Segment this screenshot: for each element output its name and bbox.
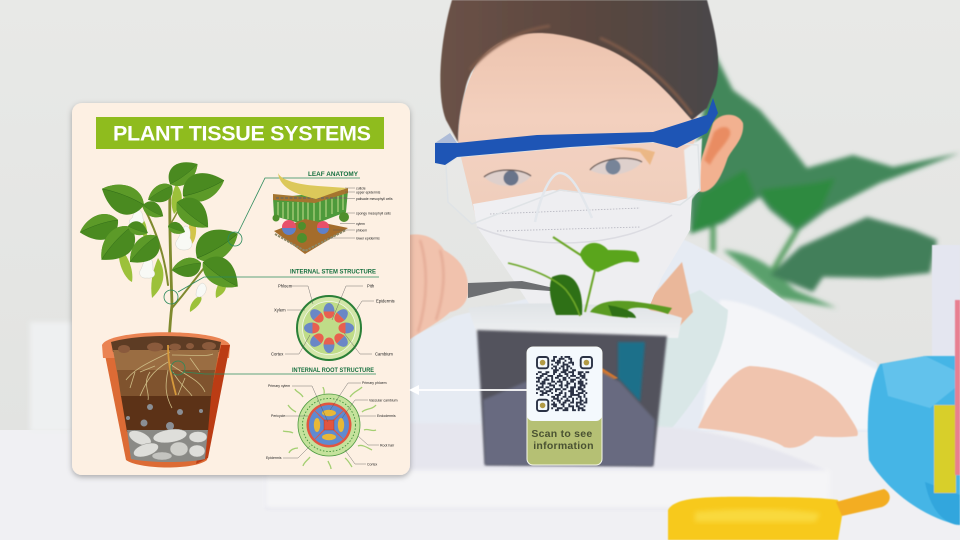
cup body (477, 330, 667, 466)
QR callout card (527, 347, 602, 465)
endodermis ring (306, 402, 352, 448)
leaf leaders (328, 188, 355, 238)
stem labels: Cambium (375, 352, 393, 356)
QR finder bottom-left (537, 400, 548, 411)
stem labels: Pith (367, 284, 375, 288)
pebbles (126, 404, 203, 430)
seedling (508, 237, 672, 318)
plastic cup rim (468, 303, 682, 338)
translucent bottle on right (932, 245, 960, 360)
scan caption: information (533, 440, 594, 452)
stem labels: Phloem (278, 284, 293, 288)
root labels: Cortex (367, 462, 378, 466)
face (458, 20, 700, 215)
cortex rings (302, 398, 356, 452)
lab coat (409, 238, 878, 432)
root hairs (283, 387, 376, 469)
stem labels: Cortex (271, 352, 284, 356)
palisade cell lines (278, 193, 343, 223)
lens side panel (684, 138, 702, 205)
upper leaf (690, 50, 960, 234)
card QR area (527, 347, 602, 421)
cell texture (276, 197, 348, 199)
leaf labels: spongy mesophyll cells (356, 212, 391, 216)
root leaders (283, 383, 379, 464)
blurred glass on left (30, 322, 75, 432)
palisade cells (273, 190, 348, 226)
vascular bundles (304, 303, 354, 353)
central xylem (324, 420, 334, 430)
root labels: Pericycle (271, 414, 285, 418)
goggles clear corner (435, 133, 457, 143)
tray front (265, 470, 830, 508)
root labels (266, 381, 398, 466)
heading: leaf anatomy: LEAF ANATOMY (308, 171, 358, 178)
top brown band (273, 188, 348, 203)
leaf anatomy diagram (272, 173, 393, 254)
neck (645, 262, 693, 334)
root labels: Root hair (380, 444, 395, 448)
tweezers (468, 281, 563, 298)
mask fold lines (477, 208, 672, 243)
pods (119, 184, 226, 312)
eyes (484, 158, 642, 186)
taproot (168, 345, 176, 395)
poster card (72, 103, 410, 475)
white tray (265, 423, 830, 510)
right hand (698, 366, 858, 448)
flower pot (102, 332, 230, 468)
heading: stem structure: INTERNAL STEM STRUCTURE (290, 268, 376, 276)
yellow cuticle (278, 173, 347, 199)
scan caption: Scan to see (531, 428, 592, 440)
hair (440, 0, 718, 142)
stem labels: Xylem (274, 308, 286, 312)
roots (126, 352, 213, 408)
flowers (129, 210, 206, 297)
pot right shade (196, 345, 230, 464)
callout lines (164, 178, 379, 375)
drainage rocks (127, 427, 207, 460)
blue container (868, 300, 960, 525)
inner shirt (652, 290, 728, 428)
finger creases (418, 240, 443, 332)
title banner: PLANT TISSUE SYSTEMS (113, 122, 371, 146)
photo background: table (0, 430, 960, 540)
face mask (473, 190, 692, 305)
leaves (77, 154, 247, 296)
safety goggles lens (446, 142, 700, 224)
stem outer circle (297, 296, 361, 360)
lower right leaf (770, 217, 937, 292)
leaf labels: lower epidermis (356, 236, 380, 240)
lens orange reflection (605, 147, 655, 165)
heading: root structure: INTERNAL ROOT STRUCTURE (292, 367, 374, 374)
bottom leaf (723, 250, 837, 308)
surface stones (118, 342, 216, 353)
lower leaf layer (274, 219, 348, 254)
pot body (103, 345, 229, 468)
root labels: Epidermis (266, 456, 282, 460)
leaf labels (356, 186, 393, 240)
vein right (317, 221, 329, 234)
cup orange fleck (602, 368, 618, 384)
vein left (282, 220, 296, 235)
stem labels (271, 284, 395, 356)
title banner (96, 117, 384, 149)
leaf labels: cuticle (356, 186, 366, 190)
soil layers (111, 336, 221, 462)
blue vascular lobes (309, 405, 349, 445)
green spongy cells (272, 212, 349, 243)
root labels: Primary xylem (268, 384, 290, 388)
leaf labels: phloem (356, 228, 367, 232)
cup teal reflection (618, 342, 645, 402)
root labels: Endodermis (377, 414, 396, 418)
stem leaders (285, 286, 374, 354)
goggles blue band (435, 98, 718, 165)
pith ring (302, 302, 356, 354)
QR finder top-right (581, 357, 592, 368)
card footer (527, 347, 602, 465)
blurred houseplant (690, 50, 960, 308)
root cortex (298, 394, 360, 456)
QR code (536, 357, 592, 411)
pot rim (102, 332, 230, 358)
bright leaf centre (692, 170, 835, 232)
hair fringe (470, 26, 692, 115)
stem labels: Epidermis (376, 298, 395, 304)
lower cell edge (275, 230, 346, 251)
root labels: Primary phloem (362, 381, 387, 385)
yellow scoop (668, 489, 890, 540)
leaf labels: xylem (356, 222, 365, 226)
cup lower soil (483, 372, 655, 466)
root labels: Vascular cambium (369, 398, 398, 402)
left hand (409, 234, 468, 340)
leaf labels: upper epidermis (356, 190, 381, 194)
ear (694, 115, 743, 192)
scoop highlight (695, 509, 820, 522)
inner ear (704, 127, 730, 165)
panel: plant tissue poster (72, 103, 410, 475)
root cross-section (266, 381, 398, 469)
goggles nose bridge (535, 173, 592, 222)
QR finder top-left (537, 357, 548, 368)
lower stems (713, 225, 797, 270)
arrow from QR card to poster (409, 385, 527, 395)
plant illustration (77, 154, 247, 392)
stem cross-section (271, 284, 395, 360)
stems (142, 186, 204, 392)
coat right highlight (700, 300, 878, 430)
leaf labels: palisade mesophyll cells (356, 197, 393, 201)
QR modules (536, 357, 589, 410)
